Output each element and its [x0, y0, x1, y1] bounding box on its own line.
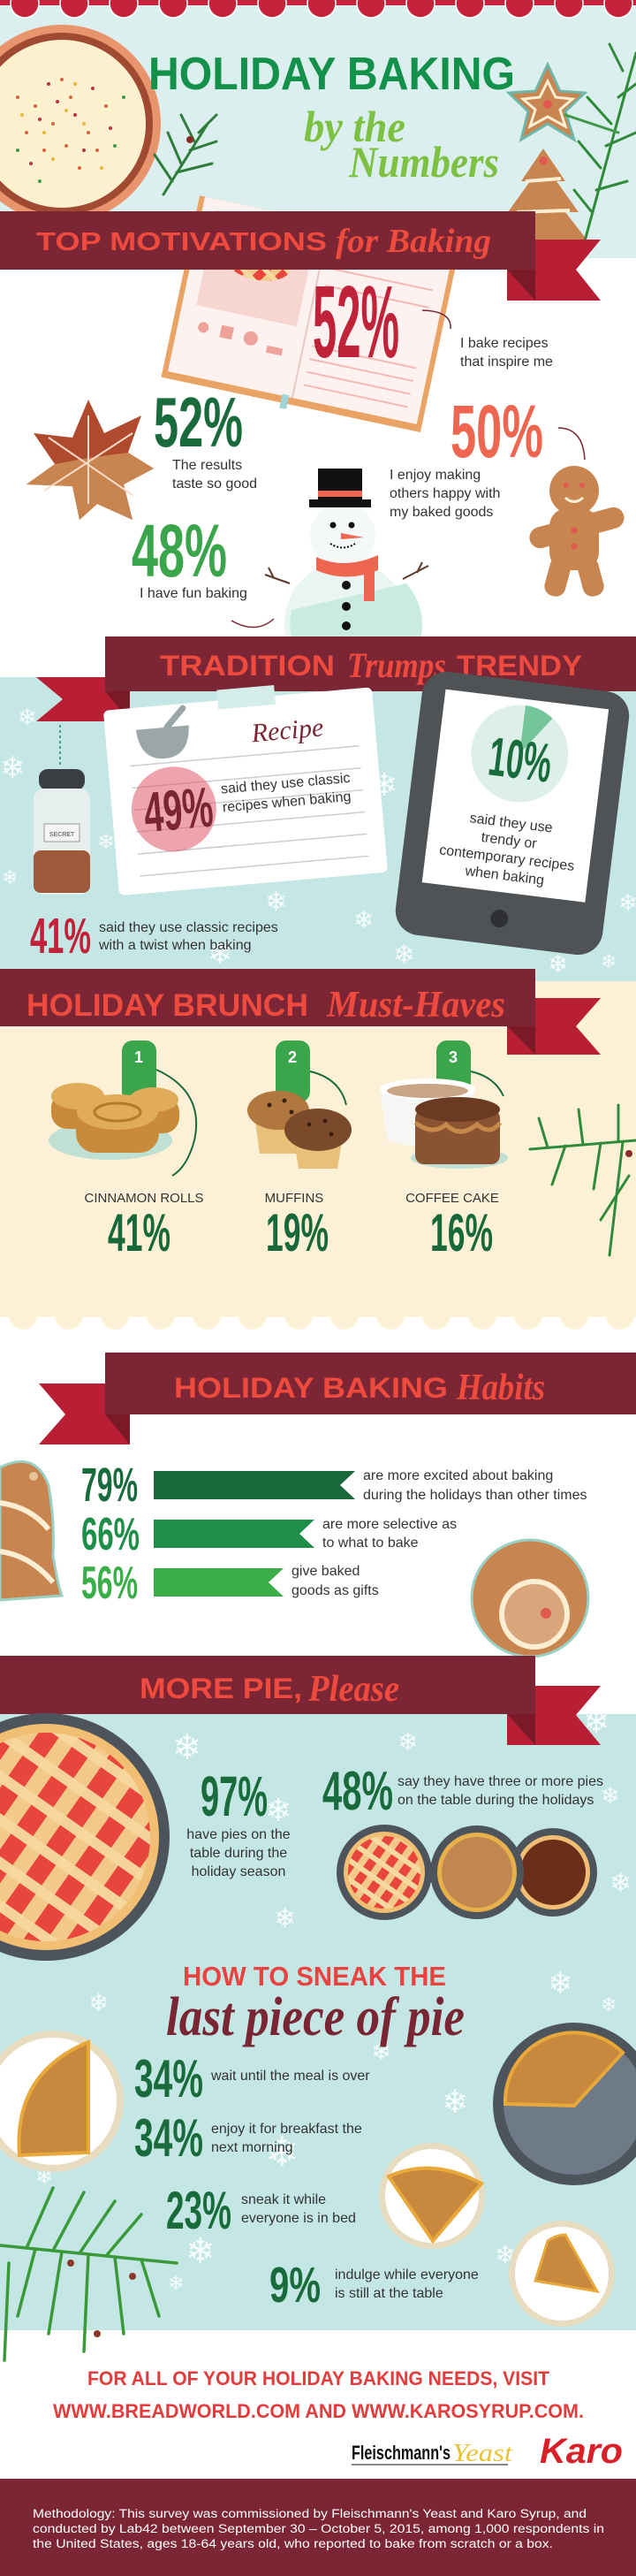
heading: how to sneak the last piece of pie: HOW TO SNEAK THE: [183, 1961, 446, 1992]
item: coffee cake: 16%: [430, 1203, 493, 1262]
illustration: tree cookie: [499, 149, 587, 240]
panel: tablet 10%: trendy or: [481, 830, 538, 852]
banner: tradition trumps trendy: TRENDY: [457, 650, 582, 682]
snowflakes decoration: ❄: [353, 906, 374, 934]
snowflakes decoration: ❄: [168, 2272, 184, 2294]
stat: 48% fun: [132, 509, 274, 628]
snowflakes decoration: ❄: [88, 1989, 109, 2016]
footer: methodology: [0, 2479, 636, 2576]
heading: how to sneak the last piece of pie: last piece of pie: [166, 1987, 465, 2047]
bar chart: habits: 56%: [81, 1558, 138, 1609]
item: cinnamon rolls: [49, 1040, 204, 1262]
banner: more pie please: MORE PIE,: [140, 1673, 302, 1704]
illustration: pie tin right: [493, 2023, 636, 2185]
pine sprig near title: [155, 115, 216, 194]
banner: more pie please: Please: [307, 1669, 399, 1710]
stats: sneak the last piece: is still at the table: [335, 2286, 443, 2301]
icon: bell cookie: [0, 1461, 62, 1600]
stat: 97%: have pies on the: [186, 1827, 291, 1842]
stats: sneak the last piece: wait until the meal is over: [210, 2069, 370, 2084]
panel: tablet 10%: contemporary recipes: [438, 842, 575, 874]
illustration: sprinkle pie top-left: [0, 25, 161, 223]
logo: Fleischmann's Yeast: [352, 2440, 513, 2467]
stat: 41% twist: said they use classic recipes: [99, 920, 278, 935]
stats: sneak the last piece: 23%: [166, 2181, 231, 2240]
banner: holiday baking habits: Habits: [456, 1368, 545, 1408]
banner: top motivations: TOP MOTIVATIONS: [36, 228, 327, 256]
panel: recipe card 49%: said they use classic: [220, 771, 351, 797]
background: title area: [0, 0, 636, 258]
stat: 41% twist: with a twist when baking: [98, 938, 252, 953]
snowflakes decoration: ❄: [583, 1703, 610, 1740]
stat: 50% happy: my baked goods: [390, 505, 493, 520]
stat: 97%: holiday season: [192, 1864, 285, 1879]
background: tradition area: [0, 677, 636, 983]
snowflakes decoration: ❄: [18, 704, 37, 730]
stat: 48% three pies: [322, 1761, 603, 1822]
item: cinnamon rolls: 41%: [108, 1203, 170, 1262]
stats: sneak the last piece: [134, 2049, 479, 2313]
snowflakes decoration: ❄: [371, 2038, 391, 2065]
background: pie area: [0, 1714, 636, 2330]
bar chart: habits: give baked: [292, 1564, 360, 1579]
call to action: WWW.BREADWORLD.COM AND WWW.KAROSYRUP.COM.: [53, 2400, 584, 2422]
snowflakes decoration: ❄: [208, 937, 233, 971]
panel: recipe card 49%: 49%: [141, 775, 216, 844]
logo: Karo: Karo: [540, 2432, 623, 2471]
stat: 52% recipes: I bake recipes: [460, 336, 549, 351]
snowflakes decoration: ❄: [442, 2084, 468, 2120]
bar chart: habits: are more selective as: [322, 1517, 457, 1532]
stat: 41% twist: [30, 908, 278, 964]
cream scallop edge: [9, 1301, 634, 1330]
snowflakes decoration: ❄: [172, 1728, 202, 1767]
illustration: star cookie: [509, 65, 585, 140]
snowflakes decoration: ❄: [265, 888, 287, 917]
background: brunch area: [0, 981, 636, 1317]
snowflakes decoration: ❄: [601, 950, 617, 972]
stat: 50% happy: 50%: [450, 390, 543, 473]
title: HOLIDAY BAKING: [148, 49, 515, 100]
title: Numbers: [348, 137, 499, 187]
footer: methodology: the United States, ages 18-64 years old, who reported to bake from scratch or a box.: [33, 2537, 553, 2550]
pine branch bottom left: [0, 2188, 177, 2360]
snowflakes decoration: [0, 704, 636, 2294]
item: coffee cake: 3: [449, 1048, 458, 1066]
stat: 48% fun: 48%: [132, 509, 227, 592]
pine branch brunch right: [530, 1105, 636, 1255]
stat: 52% results: The results: [172, 458, 242, 473]
snowflakes decoration: ❄: [371, 766, 398, 803]
stat: 52% recipes: 52%: [313, 264, 399, 379]
banner: holiday brunch must-haves: HOLIDAY BRUNCH: [26, 988, 308, 1023]
banner: tradition trumps trendy: TRADITION: [160, 650, 335, 682]
snowflakes decoration: ❄: [265, 1792, 292, 1828]
stat: 48% three pies: on the table during the holidays: [398, 1793, 594, 1808]
icon: gingerbread man: [527, 466, 626, 598]
stat: 52% results: taste so good: [172, 476, 257, 492]
item: muffins: 19%: [266, 1203, 329, 1262]
panel: recipe card 49%: [102, 676, 388, 896]
item: muffins: MUFFINS: [265, 1191, 323, 1206]
banner: holiday baking habits: [39, 1353, 636, 1444]
stats: sneak the last piece: 34%: [134, 2049, 203, 2108]
stat: 97%: table during the: [190, 1846, 287, 1861]
item: coffee cake: COFFEE CAKE: [405, 1191, 499, 1206]
illustration: big lattice pie: [0, 1713, 170, 1961]
icon: snowman: [265, 469, 428, 687]
stat: 97%: [186, 1764, 291, 1879]
stat: 50% happy: others happy with: [390, 486, 500, 501]
snowflakes decoration: ❄: [0, 751, 25, 785]
panel: tablet 10%: said they use: [469, 811, 554, 836]
call to action: FOR ALL OF YOUR HOLIDAY BAKING NEEDS, VISIT: [87, 2367, 550, 2389]
stats: sneak the last piece: next morning: [211, 2140, 293, 2155]
bar chart: habits: 79%: [81, 1459, 138, 1512]
snowflakes decoration: ❄: [601, 1782, 620, 1809]
pine branch top right: [565, 44, 636, 248]
snowflakes decoration: ❄: [2, 866, 18, 888]
stat: 52% results: 52%: [154, 383, 243, 461]
stats: sneak the last piece: 9%: [269, 2257, 321, 2313]
item: cinnamon rolls: 1: [134, 1048, 143, 1066]
call to action: [53, 2367, 584, 2422]
icon: round flower cookie: [472, 1540, 588, 1657]
snowflakes decoration: ❄: [398, 1728, 418, 1756]
footer: methodology: Methodology: This survey was commissioned by Fleischmann's Yeast and Karo Syrup, and: [33, 2507, 587, 2520]
panel: tablet 10%: when baking: [464, 864, 545, 888]
banner: top motivations: [0, 211, 601, 301]
snowflakes decoration: ❄: [274, 1904, 296, 1933]
snowflakes decoration: ❄: [610, 1869, 632, 1898]
banner: tradition trumps trendy: [36, 636, 636, 721]
snowflakes decoration: ❄: [97, 830, 115, 854]
banner: holiday brunch must-haves: Must-Haves: [326, 985, 505, 1025]
stats: sneak the last piece: everyone is in bed: [241, 2211, 356, 2226]
bar chart: habits: 66%: [81, 1509, 140, 1560]
snowflakes decoration: ❄: [186, 2232, 216, 2271]
panel: recipe card 49%: recipes when baking: [222, 789, 352, 816]
stats: sneak the last piece: indulge while everyone: [335, 2267, 479, 2283]
stat: 48% three pies: 48%: [322, 1761, 393, 1822]
item: muffins: 2: [288, 1048, 297, 1066]
icon: secret spice jar: SECRET: [49, 832, 75, 838]
snowflakes decoration: ❄: [548, 950, 568, 978]
top scallop band: [0, 0, 636, 18]
panel: tablet 10%: 10%: [485, 727, 555, 795]
bar chart: habits: goods as gifts: [292, 1583, 379, 1598]
stats: sneak the last piece: 34%: [134, 2108, 203, 2168]
illustration: plate with slice left: [0, 2031, 124, 2172]
logo: Fleischmann's Yeast: Fleischmann's: [352, 2442, 450, 2464]
stat: 50% happy: [390, 390, 585, 520]
banner: more pie please: [0, 1656, 601, 1745]
illustration: three pies: [337, 1825, 597, 1920]
stats: sneak the last piece: enjoy it for breakfast the: [211, 2122, 362, 2137]
bar chart: habits: to what to bake: [322, 1536, 419, 1551]
item: muffins: [247, 1040, 352, 1262]
bar chart: habits: during the holidays than other times: [363, 1488, 587, 1503]
stat: 48% three pies: say they have three or more pies: [398, 1774, 603, 1789]
illustration: recipe book: [160, 195, 459, 438]
stat: 52% results: [154, 383, 257, 492]
icon: secret spice jar: [34, 725, 90, 895]
snowflakes decoration: ❄: [265, 2129, 299, 2175]
stat: 97%: 97%: [201, 1764, 268, 1828]
illustration: plate with slice middle: [379, 2143, 485, 2249]
banner: holiday brunch must-haves: [0, 969, 601, 1055]
stat: 41% twist: 41%: [30, 908, 91, 964]
bar chart: habits: are more excited about baking: [363, 1468, 553, 1483]
banner: top motivations: for Baking: [336, 223, 491, 260]
bar chart: habits: [81, 1459, 587, 1609]
footer: methodology: conducted by Lab42 between September 30 – October 5, 2015, among 1,000 respondents in: [33, 2522, 604, 2535]
banner: tradition trumps trendy: Trumps: [347, 645, 446, 685]
snowflakes decoration: ❄: [393, 941, 415, 970]
illustration: plate with slice bottom right: [509, 2221, 615, 2327]
item: cinnamon rolls: CINNAMON ROLLS: [84, 1191, 204, 1206]
logo: Fleischmann's Yeast: Yeast: [452, 2440, 513, 2467]
title: [148, 49, 515, 187]
snowflakes decoration: ❄: [35, 2165, 53, 2189]
snowflakes decoration: ❄: [548, 1967, 572, 2001]
title: by the: [304, 102, 405, 151]
snowflakes decoration: ❄: [601, 1993, 617, 2016]
banner: holiday baking habits: HOLIDAY BAKING: [174, 1372, 448, 1404]
stat: 52% recipes: that inspire me: [460, 354, 553, 370]
icon: snowflake cookie: [26, 400, 154, 520]
stats: sneak the last piece: sneak it while: [241, 2192, 326, 2207]
stat: 48% fun: I have fun baking: [140, 586, 247, 601]
snowflakes decoration: ❄: [495, 2241, 515, 2268]
panel: tablet 10%: [393, 669, 632, 957]
heading: how to sneak the last piece of pie: [166, 1961, 465, 2047]
panel: recipe card 49%: Recipe: [249, 713, 325, 748]
stat: 50% happy: I enjoy making: [390, 468, 481, 483]
item: coffee cake: [380, 1040, 508, 1262]
